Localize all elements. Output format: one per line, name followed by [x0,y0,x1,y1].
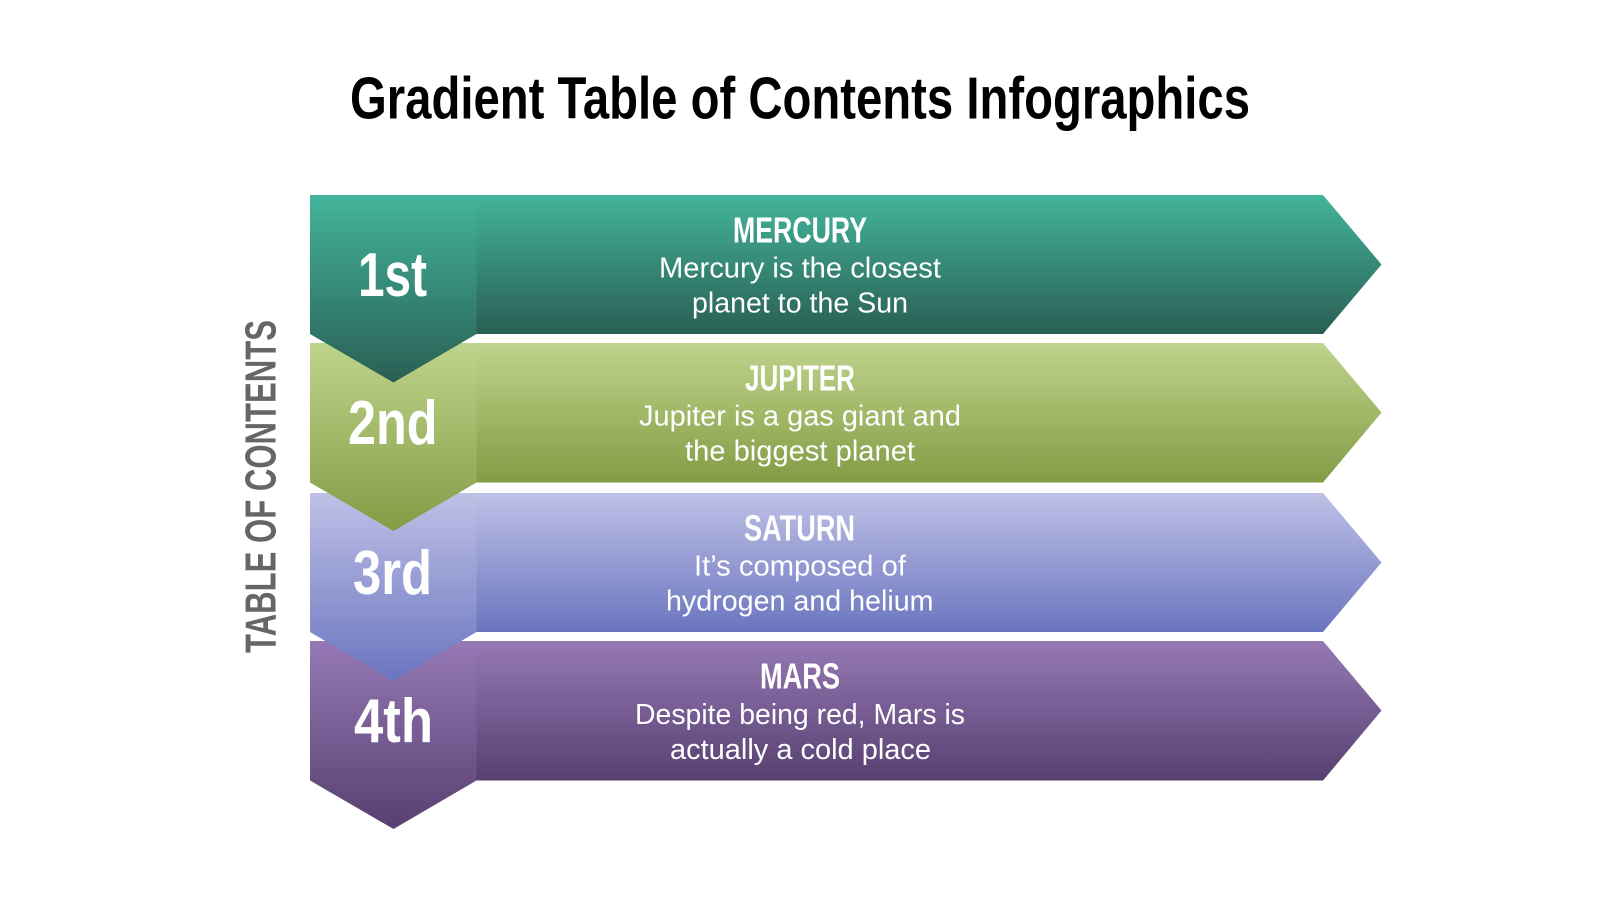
vertical label: table of contents: TABLE OF CONTENTS [236,320,286,653]
badge: 4th: 4th [354,687,433,756]
banner arrow: Saturn [476,493,1382,632]
description: Mercury: Mercury is the closest [659,252,941,284]
description: Saturn: It’s composed of [694,550,907,582]
banner arrow: Mercury [476,195,1382,334]
description: Mercury: planet to the Sun [692,288,908,320]
panel: 1st Mercury [310,195,1382,382]
badge: 1st [310,195,476,382]
badge: 2nd [310,343,476,531]
heading: MERCURY: MERCURY [733,210,867,250]
heading: SATURN: SATURN [744,508,855,548]
description: Saturn: hydrogen and helium [666,586,934,618]
badge: 1st: 1st [358,241,427,310]
badge: 4th [310,641,476,829]
panel: 2nd Jupiter [310,343,1382,531]
banner arrow: Mars [476,641,1382,780]
badge: 3rd: 3rd [353,539,432,608]
description: Mars: actually a cold place [670,734,931,766]
badge: 3rd [310,493,476,681]
panel: 3rd Saturn [310,493,1382,681]
description: Jupiter: the biggest planet [685,436,915,468]
panel: 4th Mars [310,641,1382,829]
title: Gradient Table of Contents Infographics [350,66,1250,132]
description: Mars: Despite being red, Mars is [635,699,965,731]
badge: 2nd: 2nd [348,389,438,458]
heading: MARS: MARS [760,656,840,696]
heading: JUPITER: JUPITER [745,358,855,398]
description: Jupiter: Jupiter is a gas giant and [639,400,961,432]
banner arrow: Jupiter [476,343,1382,482]
